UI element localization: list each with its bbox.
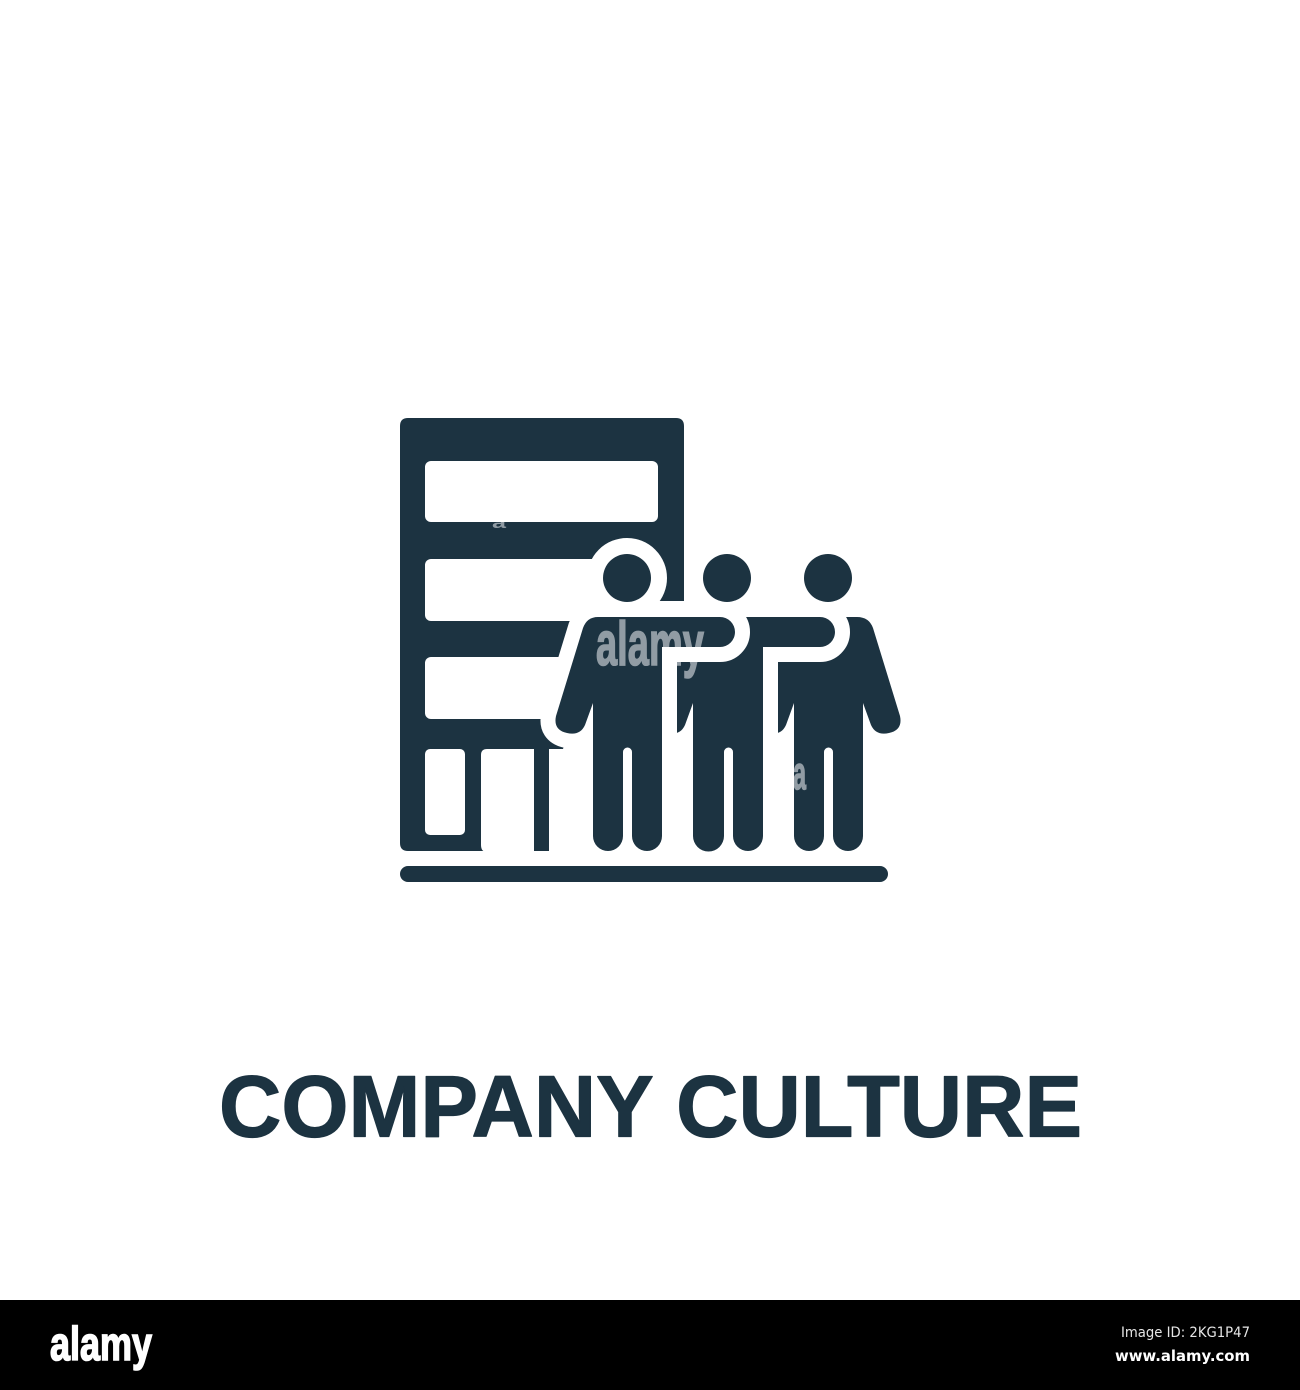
title: COMPANY CULTURE (219, 1058, 1082, 1156)
icon: company culture building with three people (400, 418, 901, 882)
watermark: a (492, 515, 506, 532)
watermark: alamy (596, 610, 704, 679)
icon: person middle (655, 554, 835, 852)
watermark (492, 515, 806, 799)
icon: person left with halo (555, 554, 735, 851)
image id: Image ID: 2KG1P47 (1121, 1325, 1250, 1341)
icon: ground line (400, 866, 888, 882)
footer bar (0, 1300, 1300, 1390)
watermark: a (793, 747, 806, 799)
website: www.alamy.com (1115, 1347, 1250, 1365)
footer logo: alamy (50, 1317, 152, 1370)
icon: person right (756, 554, 901, 851)
icon: office building (400, 418, 684, 852)
